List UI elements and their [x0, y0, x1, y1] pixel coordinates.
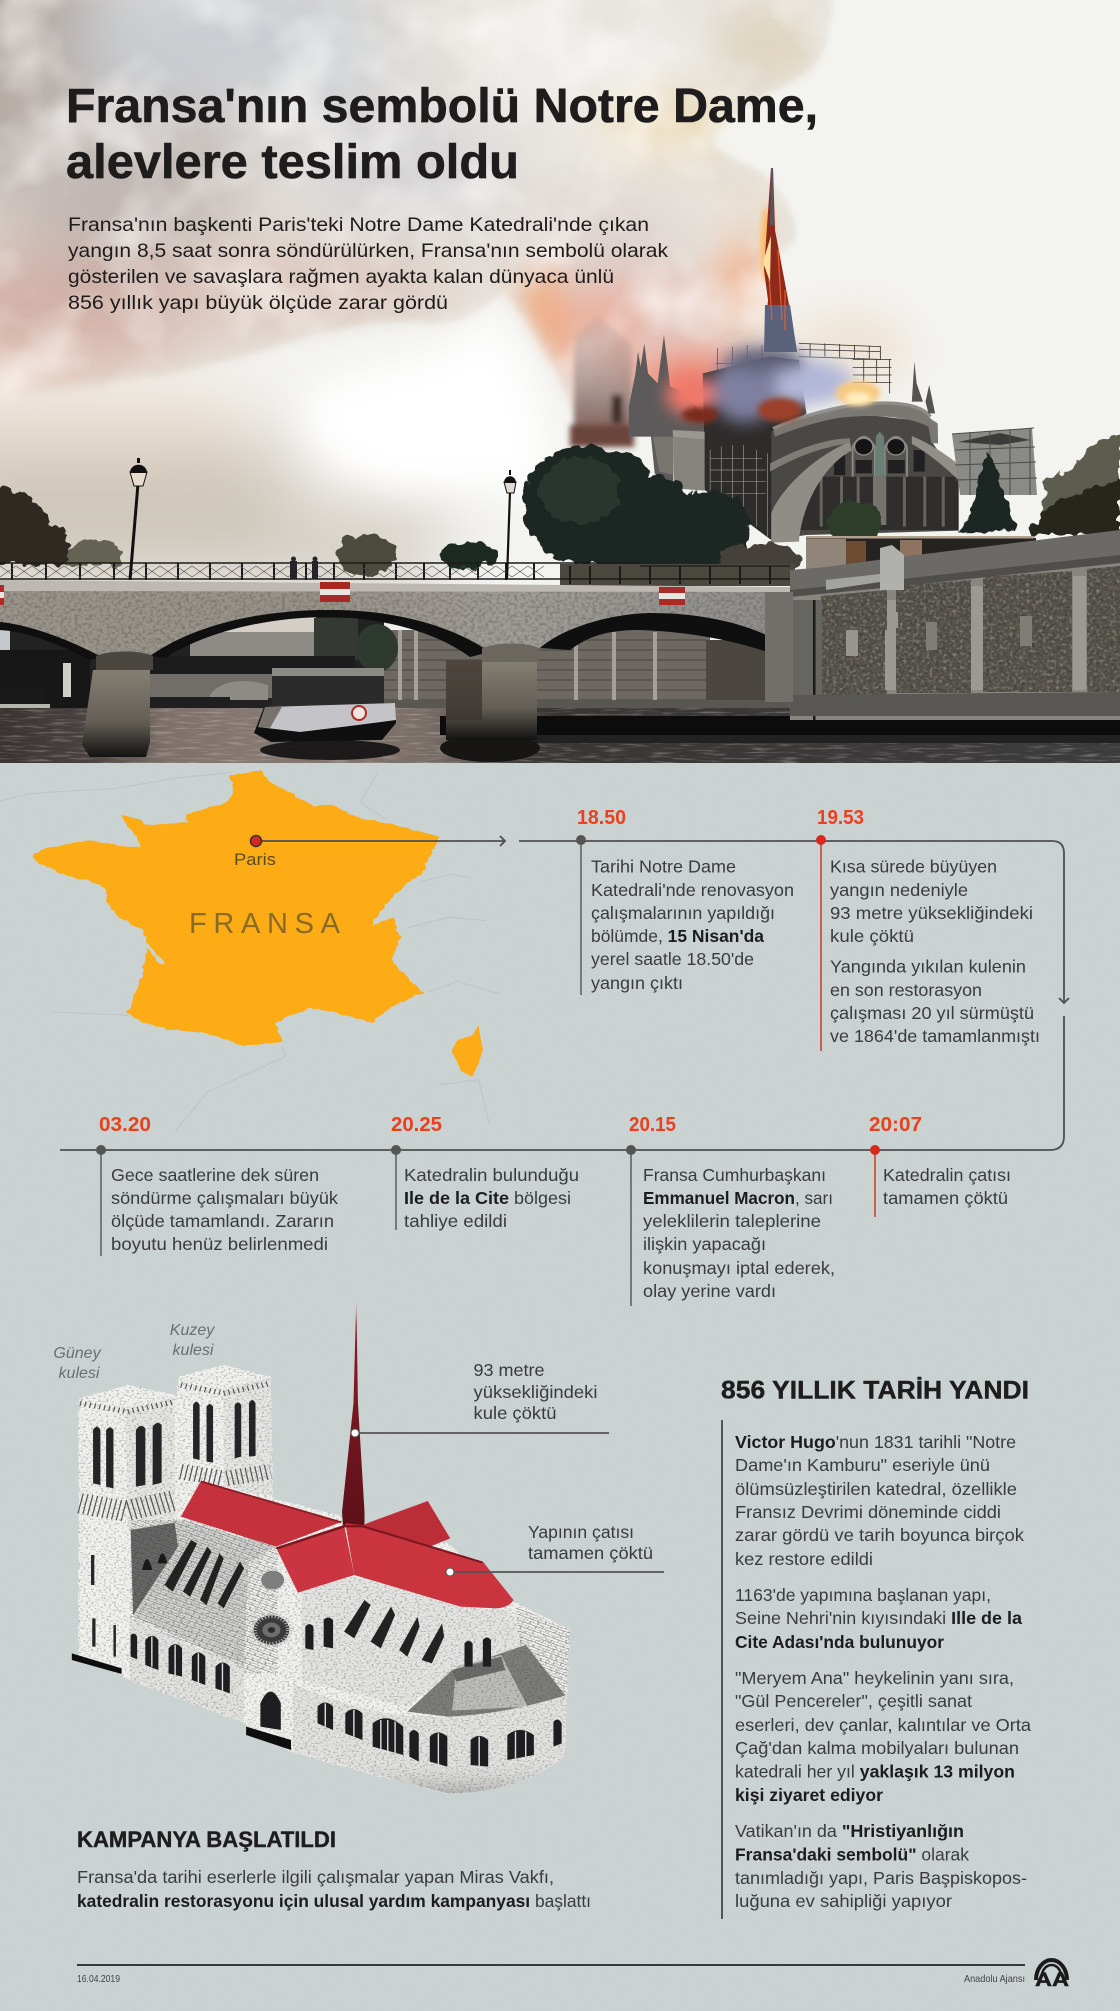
timeline event 18.50: Tarihi Notre Dame: [591, 856, 736, 876]
timeline event 19.53: ve 1864'de tamamlanmıştı: [830, 1026, 1040, 1046]
left trees: [0, 488, 496, 575]
timeline event 20.15: [626, 1114, 835, 1306]
panel: 856 years heading and text: Cite Adası'nda bulunuyor: [735, 1632, 944, 1652]
water and waterline: [0, 708, 1120, 763]
tower labels: Güney: [53, 1345, 102, 1362]
timeline event 18.50: 18.50: [577, 807, 626, 829]
cathedral illustration: [64, 1298, 579, 1800]
callout: spire collapsed: [351, 1360, 609, 1437]
timeline event 18.50: yangın çıktı: [591, 973, 683, 993]
timeline event 03.20: [96, 1114, 338, 1256]
tower labels: [53, 1322, 215, 1382]
callout: spire collapsed: kule çöktü: [474, 1403, 556, 1423]
intro text: [68, 214, 668, 314]
timeline event 18.50: Katedrali'nde renovasyon: [591, 880, 794, 900]
timeline event 20.25: 20.25: [391, 1114, 442, 1136]
timeline event 03.20: boyutu henüz belirlenmedi: [111, 1234, 328, 1254]
arched stone bridge: [0, 580, 800, 702]
timeline event 19.53: 93 metre yüksekliğindeki: [830, 903, 1033, 923]
panel: 856 years heading and text: Fransa'daki sembolü" olarak: [735, 1844, 969, 1864]
timeline event 18.50: çalışmalarının yapıldığı: [591, 903, 775, 923]
title: Fransa'nın sembolü Notre Dame,: [66, 80, 818, 133]
callout: roof collapsed: tamamen çöktü: [528, 1543, 653, 1563]
panel: campaign: [77, 1827, 591, 1911]
timeline event 20.25: tahliye edildi: [404, 1211, 507, 1231]
pine and right trees: [827, 435, 1120, 542]
timeline event 19.53: Yangında yıkılan kulenin: [830, 956, 1026, 976]
people on bridge: [290, 556, 318, 579]
left tower in smoke: [570, 315, 634, 447]
panel: 856 years heading and text: Seine Nehri'nin kıyısındaki Ille de la: [735, 1608, 1022, 1628]
tourist boat: [254, 668, 396, 742]
callout: roof collapsed: [446, 1522, 664, 1576]
panel: 856 years heading and text: "Gül Pencereler", çeşitli sanat: [735, 1691, 972, 1711]
intro text: gösterilen ve savaşlara rağmen ayakta kalan dünyaca ünlü: [68, 266, 614, 288]
timeline event 19.53: yangın nedeniyle: [830, 880, 968, 900]
panel: 856 years heading and text: Fransız Devrimi döneminde ciddi: [735, 1502, 1001, 1522]
icon: Anadolu Agency logo: AA: [1035, 1970, 1069, 1991]
no entry signs on bridge: [0, 582, 685, 605]
intro text: yangın 8,5 saat sonra söndürülürken, Fransa'nın sembolü olarak: [68, 240, 668, 262]
timeline event 20.15: 20.15: [629, 1114, 676, 1136]
footer: [77, 1960, 1069, 1991]
view through arch: distant city: [0, 610, 398, 708]
panel: 856 years heading and text: kez restore edildi: [735, 1549, 873, 1569]
timeline event 20.15: Emmanuel Macron, sarı: [643, 1188, 833, 1208]
timeline event 19.53: en son restorasyon: [830, 980, 982, 1000]
panel: 856 years heading and text: 1163'de yapımına başlanan yapı,: [735, 1585, 991, 1605]
panel: 856 years heading and text: Victor Hugo'nun 1831 tarihli "Notre: [735, 1432, 1016, 1452]
panel: 856 years heading and text: ölümsüzleştirilen katedral, özellikle: [735, 1479, 1017, 1499]
timeline event 03.20: ölçüde tamamlandı. Zararın: [111, 1211, 334, 1231]
pale scaffolding: [710, 445, 768, 537]
timeline event 20.25: [391, 1114, 579, 1231]
smoke colours: [0, 0, 814, 408]
dark upper scaffolding: [716, 343, 891, 443]
timeline event 20:07: 20:07: [869, 1114, 922, 1136]
timeline event 20.25: Katedralin bulunduğu: [404, 1165, 579, 1185]
panel: 856 years heading and text: luğuna ev sahipliği yapıyor: [735, 1891, 952, 1911]
rose windows: [853, 437, 907, 477]
tower windows: [91, 1400, 256, 1657]
trees behind bridge: [523, 445, 802, 585]
timeline event 19.53: çalışması 20 yıl sürmüştü: [830, 1003, 1034, 1023]
tower labels: kulesi: [59, 1365, 100, 1382]
dark shaded tower corner: [131, 1523, 178, 1615]
spire: [761, 168, 797, 352]
panel: campaign: KAMPANYA BAŞLATILDI: [77, 1827, 336, 1852]
panel: 856 years heading and text: 856 YILLIK TARİH YANDI: [721, 1376, 1029, 1404]
panel: 856 years heading and text: Dame'ın Kamburu" eseriyle ünü: [735, 1455, 990, 1475]
timeline event 03.20: Gece saatlerine dek süren: [111, 1165, 319, 1185]
timeline event 18.50: bölümde, 15 Nisan'da: [591, 926, 764, 946]
timeline event 03.20: söndürme çalışmaları büyük: [111, 1188, 338, 1208]
panel: 856 years heading and text: katedrali her yıl yaklaşık 13 milyon: [735, 1762, 1015, 1782]
smoke silhouette: [0, 0, 832, 430]
timeline path: [60, 836, 1069, 1150]
panel: campaign: Fransa'da tarihi eserlerle ilgili çalışmalar yapan Miras Vakfı,: [77, 1867, 554, 1887]
panel: 856 years heading and text: Vatikan'ın da "Hristiyanlığın: [735, 1821, 964, 1841]
spire: [342, 1298, 364, 1525]
tower arcades: [80, 1383, 271, 1512]
timeline event 19.53: 19.53: [817, 807, 864, 829]
cathedral body: [629, 335, 974, 543]
street lamps: [130, 458, 516, 580]
intro text: Fransa'nın başkenti Paris'teki Notre Dame Katedrali'nde çıkan: [68, 214, 649, 236]
nave buttress shadows: [164, 1540, 444, 1663]
roof: [181, 1481, 513, 1608]
France land: [32, 771, 439, 1046]
timeline event 20.15: yeleklilerin taleplerine: [643, 1211, 821, 1231]
panel: campaign: katedralin restorasyonu için ulusal yardım kampanyası başlattı: [77, 1891, 591, 1911]
quay steps under arch: [384, 630, 790, 708]
timeline event 19.53: Kısa sürede büyüyen: [830, 856, 997, 876]
bridge railing: [0, 563, 790, 584]
apse wall: [771, 411, 959, 540]
timeline event 19.53: kule çöktü: [830, 926, 914, 946]
intro text: 856 yıllık yapı büyük ölçüde zarar gördü: [68, 292, 448, 314]
callout: roof collapsed: Yapının çatısı: [528, 1522, 634, 1542]
footer: Anadolu Ajansı: [964, 1973, 1025, 1985]
flying buttresses: [771, 442, 852, 543]
timeline event 20:07: Katedralin çatısı: [883, 1165, 1011, 1185]
timeline event 18.50: [576, 807, 794, 995]
timeline event 20.15: konuşmayı iptal ederek,: [643, 1258, 835, 1278]
Paris marker: [250, 836, 262, 846]
timeline event 03.20: 03.20: [99, 1114, 151, 1136]
footer: 16.04.2019: [77, 1974, 120, 1985]
timeline event 20:07: tamamen çöktü: [883, 1188, 1008, 1208]
tower labels: kulesi: [173, 1342, 214, 1359]
title: alevlere teslim oldu: [66, 136, 519, 189]
icon: Anadolu Agency logo: [1035, 1960, 1069, 1991]
chapel and choir windows: [131, 1617, 562, 1767]
scaffold tower right: [952, 428, 1037, 495]
window mullions: [152, 1637, 526, 1767]
panel: 856 years heading and text: Çağ'dan kalma mobilyaları bulunan: [735, 1738, 1019, 1758]
bridge piers: [82, 644, 539, 757]
right quay wall: [788, 530, 1120, 720]
Paris label: Paris: [234, 850, 276, 869]
timeline event 20.15: ilişkin yapacağı: [643, 1234, 766, 1254]
France label: FRANSA: [189, 908, 341, 940]
lower sky: [0, 395, 440, 590]
bright white glow: [305, 310, 547, 490]
timeline event 20.15: olay yerine vardı: [643, 1281, 776, 1301]
timeline event 20.15: Fransa Cumhurbaşkanı: [643, 1165, 826, 1185]
tower labels: Kuzey: [170, 1322, 215, 1339]
rose window: [253, 1571, 289, 1645]
dark core behind spire: [703, 357, 806, 540]
callout: spire collapsed: yüksekliğindeki: [474, 1382, 598, 1402]
fire and blue smoke: [666, 347, 853, 422]
Corsica: [451, 1025, 483, 1077]
map of France: [0, 771, 500, 1131]
panel: 856 years heading and text: zarar gördü ve tarih boyunca birçok: [735, 1525, 1024, 1545]
timeline event 20:07: [869, 1114, 1011, 1217]
panel: 856 years heading and text: "Meryem Ana" heykelinin yanı sıra,: [735, 1668, 1014, 1688]
panel: 856 years heading and text: eserleri, dev çanlar, kalıntılar ve Orta: [735, 1715, 1031, 1735]
panel: 856 years heading and text: tanımladığı yapı, Paris Başpiskopos-: [735, 1868, 1027, 1888]
transept gothic silhouette: [629, 335, 705, 488]
timeline event 20.25: Ile de la Cite bölgesi: [404, 1188, 571, 1208]
wooden shed: [806, 536, 1036, 569]
panel: 856 years heading and text: [721, 1376, 1031, 1919]
timeline event 18.50: yerel saatle 18.50'de: [591, 949, 754, 969]
timeline event 19.53: [816, 807, 1040, 1051]
panel: 856 years heading and text: kişi ziyaret ediyor: [735, 1785, 883, 1805]
hero photo: Notre Dame on fire: [0, 0, 1120, 800]
lower arcade: [801, 477, 958, 530]
callout: spire collapsed: 93 metre: [474, 1360, 544, 1380]
title: [66, 80, 818, 189]
